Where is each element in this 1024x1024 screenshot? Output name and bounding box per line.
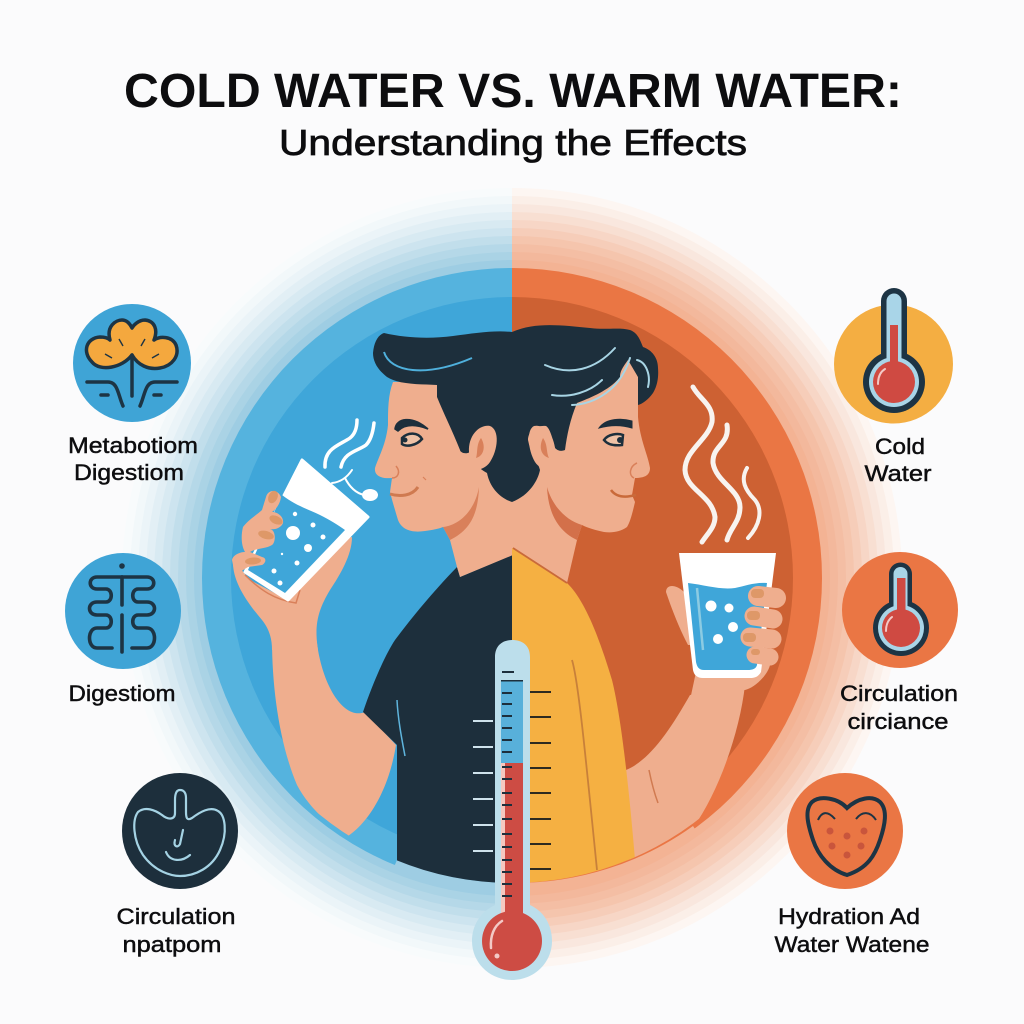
label: circulation circiance: Circulation xyxy=(840,681,958,706)
label: metabolism: Digestiom xyxy=(74,460,184,485)
central thermometer xyxy=(472,640,552,980)
icon: metabolism flower xyxy=(73,304,191,422)
title xyxy=(124,65,902,163)
icon: intestines xyxy=(65,553,181,669)
title: COLD WATER VS. WARM WATER: xyxy=(124,65,902,118)
icon: stomach xyxy=(122,773,238,889)
icon: thermometer on orange xyxy=(842,552,958,668)
label: circulation circiance: circiance xyxy=(848,709,948,734)
label: circulation: Circulation xyxy=(116,904,236,929)
label: digestion: Digestiom xyxy=(68,681,176,706)
infographic xyxy=(65,74,958,980)
label: hydration: Hydration Ad xyxy=(778,904,920,929)
label: cold water xyxy=(864,434,932,486)
cold water glass and hand xyxy=(232,420,378,650)
label: hydration xyxy=(774,904,930,957)
label: circulation circiance xyxy=(840,681,958,734)
icon: thermometer on yellow xyxy=(834,301,953,424)
label: metabolism xyxy=(68,433,198,485)
title: Understanding the Effects xyxy=(279,122,747,163)
label: hydration: Water Watene xyxy=(774,932,930,957)
label: metabolism: Metabotiom xyxy=(68,433,198,458)
warm water glass and steam xyxy=(666,387,776,700)
label: circulation: npatpom xyxy=(122,932,222,957)
icon: tongue xyxy=(787,773,903,889)
right figure with warm water xyxy=(512,325,745,890)
warm half background circle xyxy=(512,188,901,966)
left figure drinking cold water xyxy=(272,331,513,890)
label: circulation xyxy=(116,904,236,957)
label: cold water: Water xyxy=(864,461,932,486)
label: cold water: Cold xyxy=(875,434,925,459)
cold half background circle xyxy=(131,196,512,958)
